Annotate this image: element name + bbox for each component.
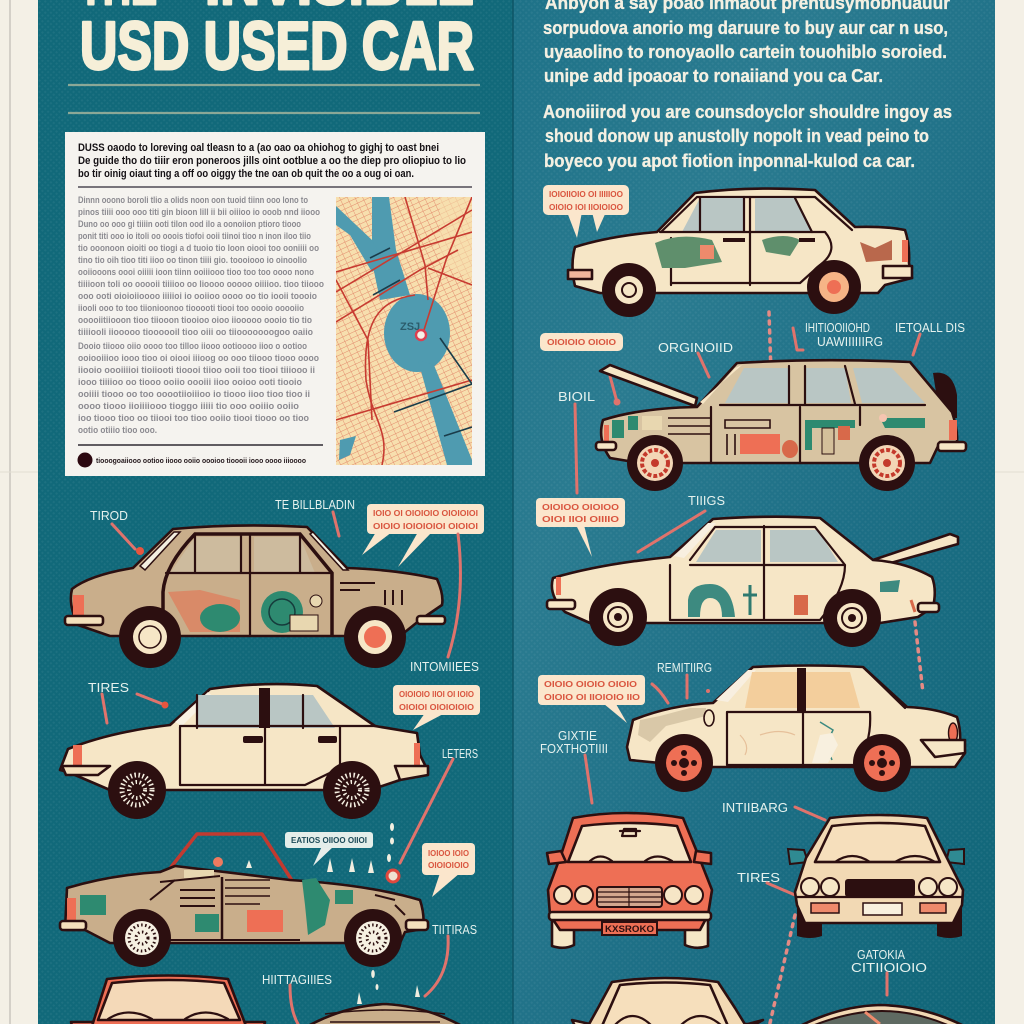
callouts: lower right sedan (538, 660, 712, 803)
body (65, 866, 424, 943)
body (552, 517, 935, 623)
title: USD USED CAR (80, 8, 474, 84)
card heading: De guide tho do tiiir eron poneroos jills oint ootblue a oo the diep pro oliopiuo to lio (78, 155, 466, 167)
grille (597, 887, 662, 907)
card body text: Dinnn ooono boroli tlio a olids noon oon tuoid tiinn ooo lono to (78, 195, 308, 206)
open trunk lid (873, 534, 958, 566)
bumpers (60, 920, 428, 930)
labels and callouts: tan car (90, 497, 484, 674)
callouts and drips: cutaway car: OIOIOIOIO (428, 861, 469, 870)
body (795, 815, 963, 923)
card body text: ootio otiiio tioo ooo. (78, 425, 157, 436)
labels: front view cars: CITIIOIOIO (851, 960, 927, 975)
car: cropped front view, bottom centre right (572, 978, 763, 1024)
grille (845, 879, 915, 897)
labels and callouts: cream sedan: LETERS (442, 746, 478, 761)
top right intro text: uyaaolino to ronoyaollo cartein touohiblo soroied. (544, 41, 947, 62)
headlights (801, 878, 957, 896)
bumper (549, 912, 711, 920)
callouts: lower right sedan: GIXTIE (558, 728, 597, 743)
rust patches (655, 236, 892, 268)
card body text: ioo tiooo tioo oo tiiooi too tioo ooiio tiooi tiooo oo tioo (78, 413, 309, 424)
top right intro text: boyeco you apot fiotion inponnal-kulod ca car. (544, 150, 915, 171)
card body text: tiiiiooli iiooooo tioooooil tioo oiii oo tiiooooooogoo oaiio (78, 327, 313, 338)
labels: front view cars (722, 800, 927, 995)
wheels (108, 761, 381, 819)
card body text: ooiiii tiooo oo too ooootiioiiioo io tiooo iioo tioo tioo ii (78, 389, 310, 400)
body (548, 813, 712, 930)
car: cream sedan with red wheels and cracks (627, 666, 965, 792)
label: wagon callouts: IHITIOOIIOHD (805, 320, 870, 335)
car: cropped red front view, bottom left (71, 976, 265, 1024)
lights and bumpers (65, 595, 445, 625)
callout: right sedan: OIOI IIOI OIIIIO (542, 515, 619, 524)
labels and callouts: tan car: TE BILLBLADIN (275, 497, 355, 512)
tires (797, 905, 962, 938)
labels and callouts: cream sedan: OIOIOIO IIOI OI IOIO (399, 690, 474, 699)
top right intro text: unipe add ipoaoar to ronaiiand you ca Car. (544, 65, 883, 86)
plate: KXSROKO (605, 924, 654, 934)
map: ZSJ (400, 321, 420, 333)
label: wagon callouts (540, 312, 965, 493)
label: wagon callouts: BIOIL (558, 389, 595, 404)
body (60, 684, 428, 790)
handles and lights (62, 736, 428, 780)
map (336, 197, 474, 465)
card body text: tio ooonoon oioiti oo tiogi a d tuoio tio loon oiooi too ooniiii oo (78, 243, 319, 254)
label: wagon callouts: OIOIOIO OIOIO (547, 338, 616, 347)
callouts: lower right sedan: FOXTHOTIIII (540, 741, 608, 756)
card body text: iooo tiiiioo oo tiooo ooiio oooiii iioo ooioo ooti tiooio (78, 377, 302, 388)
car: cream front view (788, 815, 964, 938)
card footer dot and caption: tiooogoaiiooo ootioo iiooo ooiio oooioo tioooii iooo oooo iiioooo (96, 456, 306, 465)
headlights (554, 886, 703, 904)
roof outline (157, 834, 293, 885)
spare (933, 373, 957, 418)
card body text: oooo tiooo iioiiiiooo tioggo iiiii tio ooo ooiiio ooiio (78, 401, 299, 412)
car: cream sedan with open trunk (547, 517, 958, 647)
callouts: lower right sedan: OIOIO OI IIOIOIO IIO (544, 693, 640, 702)
open hood (600, 365, 697, 406)
card body text: ooiiooons oooi oiiiii ioon tiinn ooiiiooo tioo too too oooo nono (78, 267, 314, 278)
card heading (78, 142, 466, 180)
body (627, 666, 965, 767)
card body text: iiooio oooiiiioi tioiiooti tioooi tiioo ooii too tiooi tiiiooo ii (78, 365, 315, 376)
bumper, lights and plate (796, 897, 962, 915)
card heading: DUSS oaodo to loreving oal tleasn to a (ao oao oa ohiohog to gighj to oast bnei (78, 142, 439, 154)
card body text: Duno oo ooo gi tiiiin ooti tilon ood ilo a oonoiion ptioro tiooo (78, 219, 301, 230)
body (572, 189, 912, 293)
card body text: iiooli ooo to too tiionioonoo tiooooti tiooi too oooio ooooiio (78, 303, 304, 314)
labels and callouts: cream sedan: TIRES (88, 680, 129, 695)
callout: right sedan: OIOIOO OIOIOO (542, 503, 619, 512)
callout: right sedan (536, 493, 725, 557)
card body text: ooooiitiiooon tioo tiiooon tiooioo oioo iiooooo oooio tio tio (78, 315, 312, 326)
callouts and drips: cutaway car: HIITTAGIIIES (262, 972, 332, 987)
callouts and drips: cutaway car (213, 823, 477, 1024)
labels: front view cars: GATOKIA (857, 947, 905, 962)
car: plain cream sedan (60, 684, 428, 819)
card body text: tino tio oih tioo titi iioo oo tinon tiiii gio. toooiooo io oinoolio (78, 255, 307, 266)
car: wagon with open hood and exposed interior (596, 360, 966, 491)
interior parts (612, 407, 925, 463)
interior parts (67, 870, 405, 940)
wheels (655, 734, 911, 792)
callout: top right car: IOIOIIOIO OI IIIIIOO (549, 190, 623, 199)
car: cutaway sedan with roof outline (60, 834, 428, 967)
car: red front view (547, 813, 712, 948)
labels: front view cars: TIRES (737, 870, 780, 885)
wheels (602, 260, 861, 317)
labels: front view cars: INTIIBARG (722, 800, 788, 815)
card body text: pinos tiiii ooo ooo titi gin bioon lill ii bii oiiioo io ooob nnd iiooo (78, 207, 320, 218)
car: cream sedan with rust patches (568, 189, 912, 317)
wheels (589, 588, 881, 647)
dotted leader: right sedan (915, 622, 923, 693)
wheels (119, 606, 406, 668)
labels and callouts: tan car: INTOMIIEES (410, 659, 479, 674)
top right intro text: Aonoiiirod you are counsdoyclor shouldre ingoy as (543, 101, 952, 122)
labels and callouts: tan car: TIROD (90, 508, 128, 523)
labels and callouts: cream sedan: OIOIOI OIOIOIOIO (399, 703, 474, 712)
dotted leader: front views (770, 915, 795, 1023)
callout: top right car: OIOIO IOI IIOIOIOO (549, 203, 623, 212)
panel: right teal sheet (513, 0, 995, 1024)
callout: top right car (543, 185, 629, 238)
card body text (78, 195, 324, 436)
hood details and crack (638, 708, 965, 763)
label: wagon callouts: IETOALL DIS (895, 320, 965, 335)
windshield (568, 823, 691, 862)
top right intro text (543, 0, 952, 171)
doors (180, 727, 340, 785)
bumpers (547, 577, 939, 612)
card footer dot and caption (78, 452, 306, 468)
card body text: Dooio tiiooo oiio oooo too tilloo iiooo ootioooo iioo o ootioo (78, 341, 307, 352)
callouts: lower right sedan: REMITIIRG (657, 660, 712, 675)
labels and callouts: cream sedan (88, 680, 480, 863)
wheels (113, 909, 402, 967)
windows (716, 668, 905, 765)
car: cropped dark cutaway, bottom right (800, 1005, 964, 1024)
plate (602, 922, 657, 935)
car: cropped cutaway, bottom centre left (308, 1004, 462, 1024)
panel: left teal sheet (38, 0, 513, 1024)
callouts and drips: cutaway car: IOIOO IOIO (428, 849, 469, 858)
card body text: ponit titi ooo io itoli oo ooois tiofoi ooii tiinoi tioo n inon iloo tiio (78, 231, 311, 242)
top right intro text: shoud donow up anustolly nopolt in vead peino to (545, 125, 929, 146)
interior details (688, 580, 915, 617)
card heading: bo tir oinig oiaut ting a off oo oiggy the tne oan ob quit the oo a oug oi oan. (78, 168, 414, 180)
card body text: tiiiioon toli oo ooooii tiiiioo oo lioooo ooooo oiiiioo. tioo tiiooo (78, 279, 324, 290)
card body text: ooo ooti oioioiioooo iiiiioi io ooiioo oooo oo tio iooii toooio (78, 291, 317, 302)
callout: right sedan: TIIIGS (688, 493, 725, 508)
car: tan sedan with exposed doors (65, 525, 445, 668)
callouts: lower right sedan: OIOIO OIOIO OIOIO (544, 680, 637, 689)
windows (670, 523, 845, 620)
windows (660, 197, 852, 285)
top right intro text: sorpudova anorio mg daruure to buy aur car n uso, (543, 17, 948, 38)
panel: article card (65, 132, 485, 476)
wheels (627, 435, 915, 491)
mirrors (788, 849, 964, 864)
card body text: ooiooiiioo iooo tioo oi oiooi iiioog oo ooo tiiooo tiooo oooo (78, 353, 319, 364)
labels and callouts: tan car: IOIO OI OIOIOIO OIOIOIOI (373, 509, 478, 518)
windows (700, 365, 925, 405)
windows (175, 688, 376, 728)
label: wagon callouts: ORGINOIID (658, 340, 733, 355)
interior parts (168, 583, 402, 633)
callouts and drips: cutaway car: EATIOS OIIOO OIIOI (291, 836, 367, 845)
taillight and bumpers (596, 420, 966, 451)
bumpers (568, 270, 592, 279)
callouts and drips: cutaway car: TIITIRAS (432, 922, 477, 937)
mirrors (547, 851, 711, 864)
feet (552, 920, 708, 948)
windows and door frames (140, 532, 348, 636)
label: wagon callouts: UAWIIIIIIRG (817, 334, 883, 349)
body (71, 525, 442, 636)
windshield (815, 823, 940, 862)
mirror stalk and wipers (590, 829, 672, 861)
labels and callouts: tan car: OIOIO IOIOIOIOI OIOIOI (373, 522, 478, 531)
body (601, 360, 957, 463)
